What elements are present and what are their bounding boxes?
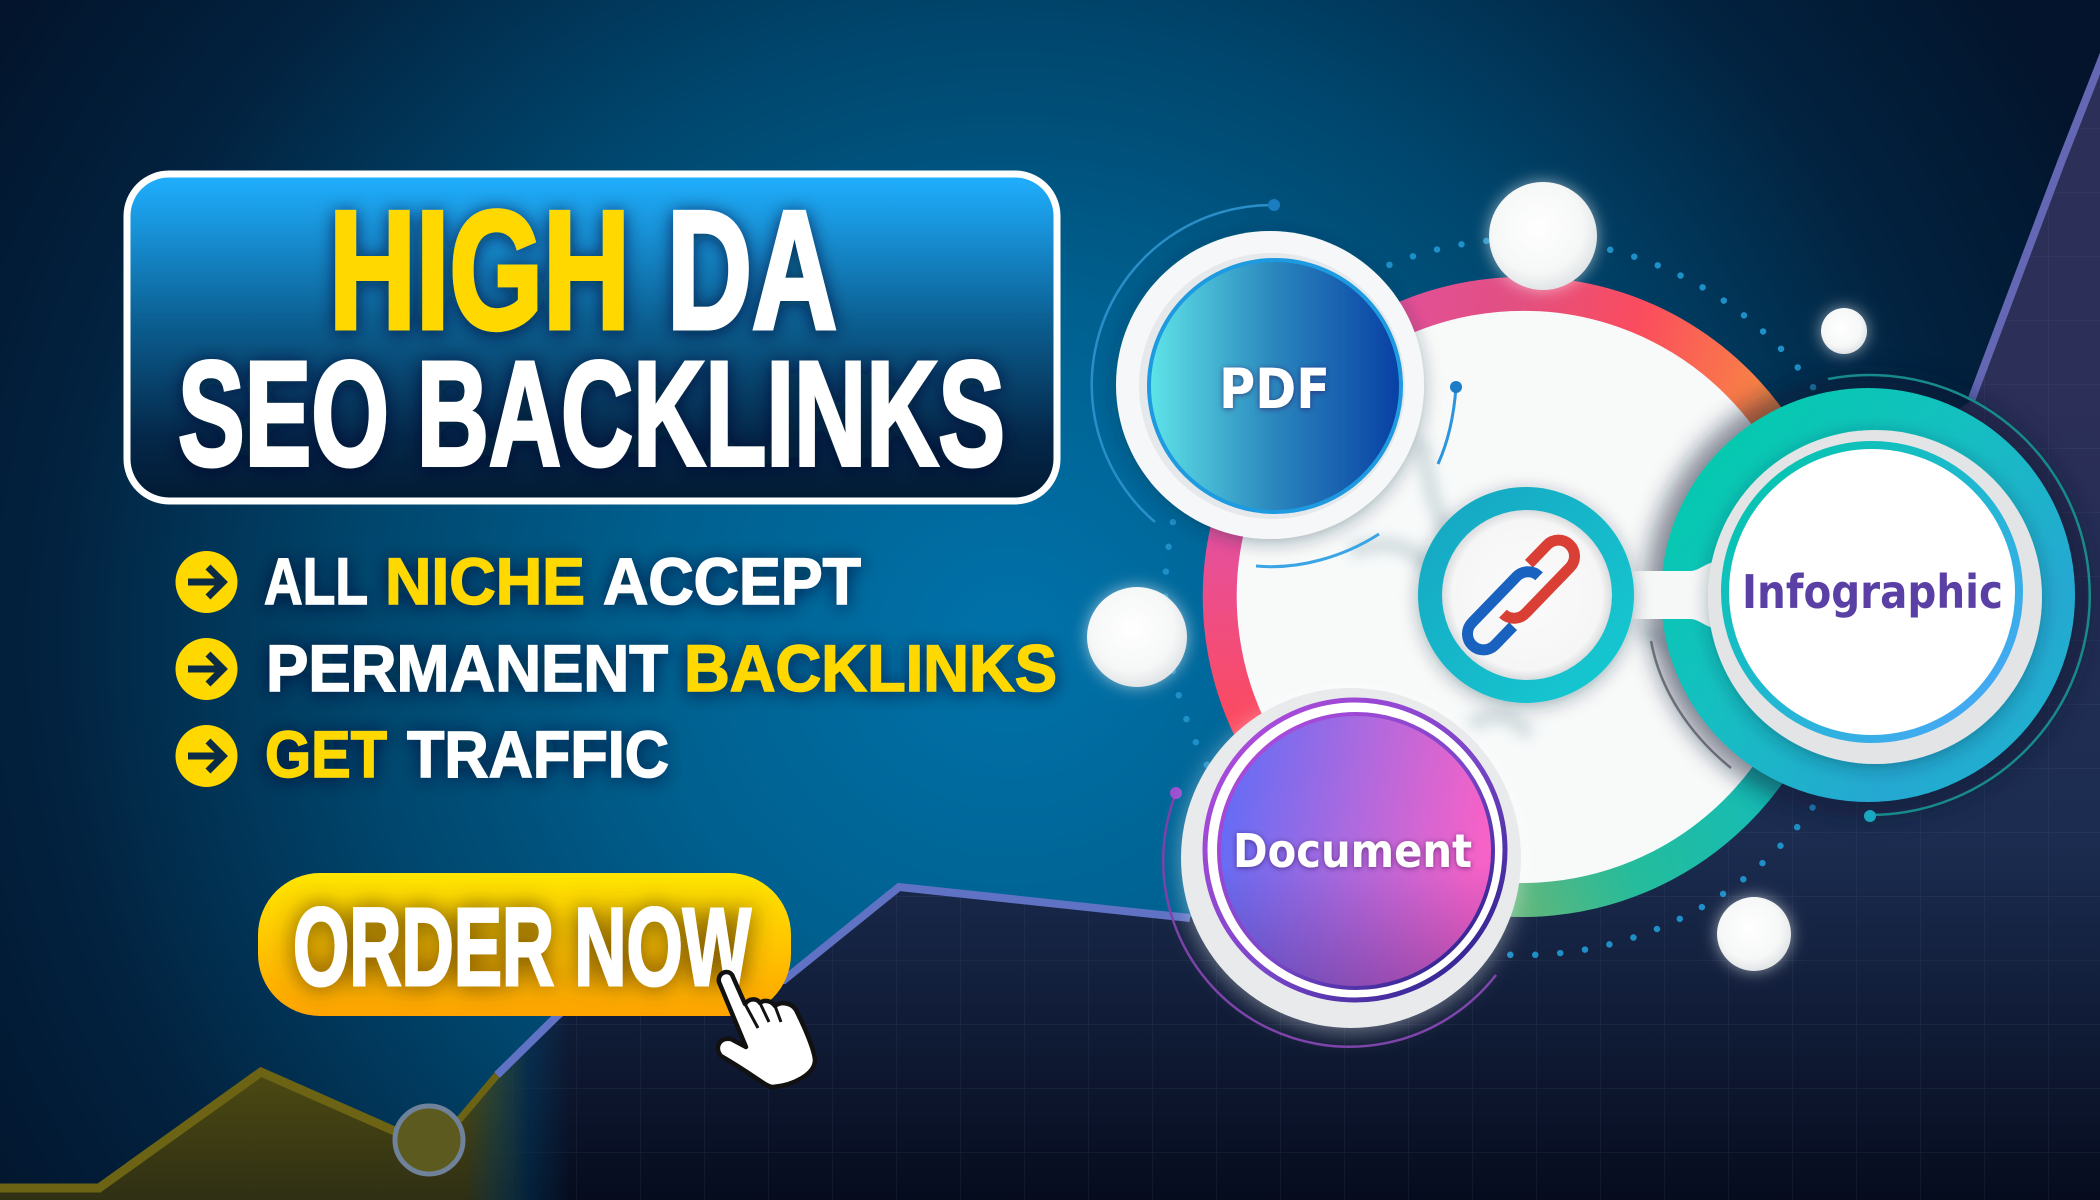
teal ring (1418, 487, 1634, 703)
pdf outer disc (1116, 231, 1424, 539)
inner fill (1219, 714, 1493, 988)
red link (1491, 534, 1581, 625)
bullet: permanent backlinks: BACKLINKS (684, 631, 1057, 705)
thin arc with dot (1092, 199, 1280, 522)
heading: high da: DA (667, 176, 837, 364)
ball: right (1821, 308, 1867, 354)
teal ring (1661, 388, 2075, 802)
connector shading (1350, 440, 1700, 735)
title panel (127, 174, 1057, 501)
bullet: all niche accept: ALL (264, 544, 368, 618)
purple ring (1205, 700, 1505, 1000)
thin arc: pdf inner (1438, 381, 1462, 464)
thin arc with dot (1163, 787, 1496, 1047)
ring segment: top (1349, 294, 1808, 493)
bullet: all niche accept (176, 544, 861, 618)
pdf grey rim (1139, 253, 1405, 519)
label: document: Document (1233, 824, 1472, 878)
blue link (1461, 565, 1551, 656)
infographic node (1620, 373, 2090, 822)
icon: pointing hand cursor (718, 972, 815, 1087)
thin arc: pdf lower (1256, 534, 1379, 567)
order now button (258, 873, 791, 1016)
ring segment: left (1220, 493, 1275, 771)
thin arc: infographic lower (1651, 641, 1731, 768)
heading: high da: HIGH (329, 176, 630, 364)
label: pdf: PDF (1219, 357, 1330, 421)
pdf node (1092, 199, 1424, 539)
bullet: all niche accept: ACCEPT (603, 544, 861, 618)
icon: chain link (1461, 534, 1581, 656)
label: infographic: Infographic (1742, 565, 2003, 619)
network diagram (1087, 182, 2090, 1047)
pdf gradient circle (1149, 260, 1401, 512)
dotted orbit (1165, 239, 1881, 955)
bullet: get traffic (176, 717, 669, 791)
thin outer arc (1828, 375, 2090, 822)
bullet: all niche accept: NICHE (385, 544, 585, 618)
bridge (1620, 560, 1722, 630)
inner shade (1221, 716, 1491, 986)
heading: seo backlinks: SEO BACKLINKS (178, 330, 1005, 497)
main white disc (1235, 309, 1811, 885)
ring segment: bottom (1445, 748, 1785, 900)
bullet list (176, 544, 1057, 791)
bullet: get traffic: TRAFFIC (407, 717, 669, 791)
document node (1163, 688, 1521, 1047)
dark halo (1646, 373, 2090, 817)
grey ring (1708, 430, 2042, 764)
ball: left (1087, 587, 1187, 687)
ball: bottom (1717, 897, 1791, 971)
central link node (1418, 487, 1634, 703)
bullet: permanent backlinks (176, 631, 1057, 705)
ball: top (1489, 182, 1597, 290)
order now button: ORDER NOW (293, 886, 751, 1009)
colored ring (1725, 445, 2019, 739)
white inner disc (1442, 510, 1612, 680)
bullet: get traffic: GET (265, 717, 387, 791)
document outer disc (1181, 688, 1521, 1028)
chart marker circle (395, 1106, 463, 1174)
bullet: permanent backlinks: PERMANENT (266, 631, 668, 705)
